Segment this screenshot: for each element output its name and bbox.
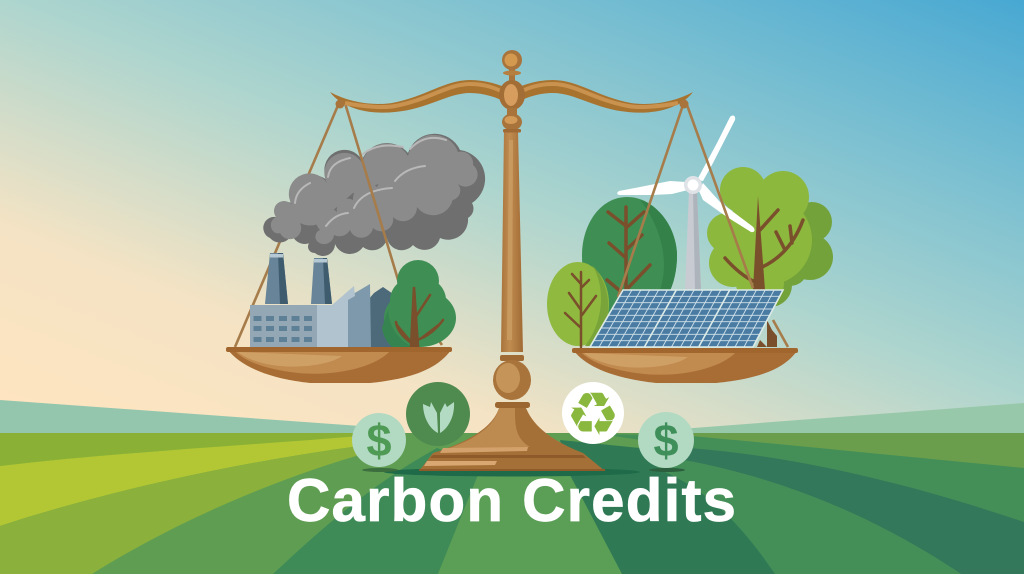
- coin: dollar left: [352, 413, 406, 467]
- ground: hills and fields: [0, 400, 1024, 574]
- small trunk behind solar panel: [757, 320, 777, 347]
- beam pivots: [336, 100, 344, 108]
- hub: [684, 176, 702, 194]
- big tree main lobes: [707, 167, 812, 307]
- title: Carbon Credits: [287, 467, 737, 534]
- big tree trunk: [753, 196, 765, 290]
- wind turbine: [617, 116, 755, 290]
- coin: dollar right: [638, 412, 694, 468]
- rim: [572, 348, 798, 353]
- smoke cloud: [263, 134, 485, 256]
- big tree shade lobes: [748, 202, 833, 307]
- panel frames: [590, 290, 783, 347]
- centre knuckle: [499, 80, 525, 110]
- cloud lower light lobes: [315, 177, 453, 244]
- tree on left pan: [382, 260, 456, 347]
- big lime tree right: [707, 167, 833, 307]
- right pan: [572, 348, 798, 383]
- right pan strings: [618, 105, 788, 347]
- factory windows: [254, 316, 312, 342]
- chimney one: [265, 253, 288, 304]
- beam right arm: [511, 80, 693, 113]
- post: [501, 130, 523, 352]
- left tree crown: [384, 260, 456, 347]
- distant hill right: [680, 403, 1024, 434]
- cloud shadow between wisps: [318, 184, 398, 231]
- balance scale: [330, 50, 693, 471]
- rim: [226, 347, 452, 352]
- ball: [493, 360, 531, 400]
- solar panels: [590, 290, 783, 347]
- base cone: [419, 408, 605, 471]
- base collar: [495, 402, 530, 408]
- icon: leaves: [423, 402, 454, 433]
- post collar: [500, 355, 524, 361]
- panel grid: [594, 290, 780, 347]
- left pan second string: [345, 103, 442, 345]
- base highlights: [440, 447, 528, 453]
- left pan: [226, 347, 452, 383]
- lower bead: [502, 108, 522, 132]
- left tree trunk: [396, 287, 443, 347]
- small lime tree right: [547, 262, 609, 347]
- coin shadow left: [362, 468, 398, 472]
- top finial: [502, 50, 522, 86]
- beam left arm: [330, 80, 512, 113]
- coin: dollar right: $: [653, 415, 679, 466]
- factory sawtooth roof sections: [368, 287, 396, 347]
- left pan strings behind cloud: [235, 103, 339, 347]
- sky background: [0, 0, 1024, 440]
- distant hill left: [0, 400, 360, 434]
- panel face: [590, 290, 783, 347]
- bowl: [574, 351, 797, 383]
- bowl: [228, 350, 451, 383]
- coin: recycle: ♻: [566, 380, 620, 450]
- coin: leaf: [406, 382, 470, 446]
- field stripes: [0, 433, 1024, 574]
- factory main block: [250, 305, 317, 347]
- chimney two: [311, 258, 332, 304]
- dark tree right: [582, 197, 677, 320]
- cloud upper light lobes: [271, 135, 478, 239]
- coin: dollar left: $: [366, 415, 392, 466]
- coin shadow right: [649, 468, 685, 472]
- tower: [685, 190, 701, 290]
- blades: [697, 116, 735, 181]
- factory: [250, 253, 396, 347]
- base shadow: [384, 468, 640, 476]
- cloud dark base: [263, 134, 485, 256]
- cloud highlights: [295, 138, 446, 226]
